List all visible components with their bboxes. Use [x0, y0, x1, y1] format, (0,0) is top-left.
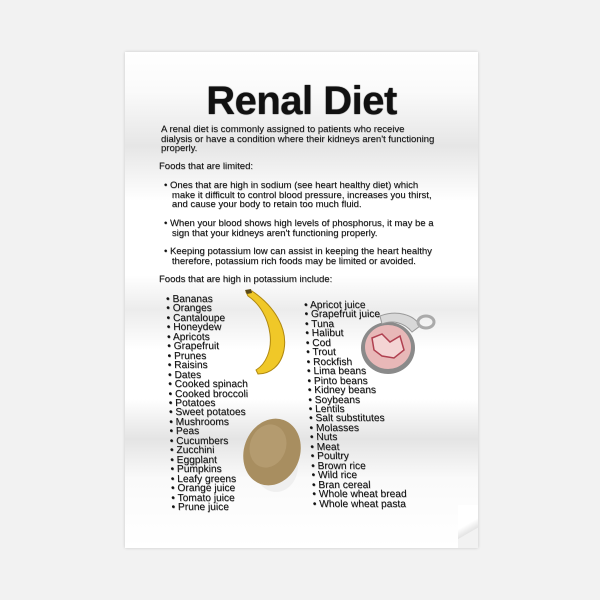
poster sheet	[125, 52, 478, 548]
list: right column: • Grapefruit juice	[304, 309, 380, 320]
list: right column: • Kidney beans	[308, 385, 376, 396]
list: left column: • Cucumbers	[170, 436, 228, 447]
bullet: potassium	[164, 246, 432, 267]
list: left column: • Oranges	[166, 303, 212, 314]
list: right column: • Molasses	[309, 423, 359, 434]
list: left column: • Dates	[168, 370, 201, 381]
list: left column: • Orange juice	[171, 483, 235, 494]
bullet: phosphorus	[164, 218, 434, 239]
list: right column: • Brown rice	[311, 461, 366, 472]
page curl	[458, 505, 478, 548]
list: right column: • Apricot juice	[304, 300, 366, 311]
title: Renal Diet	[206, 79, 397, 123]
bullet: potassium: • Keeping potassium low can assist in keeping the heart healthy	[164, 246, 432, 257]
icon: tuna can	[361, 312, 436, 374]
bullet: phosphorus: • When your blood shows high levels of phosphorus, it may be a	[164, 218, 433, 229]
list: left column: • Prunes	[167, 351, 206, 362]
list: right column: • Salt substitutes	[309, 413, 385, 424]
bullet: sodium: • Ones that are high in sodium (see heart healthy diet) which	[164, 180, 418, 191]
list: right column: • Lentils	[308, 404, 345, 415]
heading: limited: Foods that are limited:	[159, 161, 253, 172]
list: right column: • Meat	[310, 442, 340, 453]
list: left column: • Honeydew	[167, 322, 222, 333]
list: right column: • Soybeans	[308, 395, 360, 406]
list: right column: • Whole wheat bread	[312, 489, 407, 500]
bullet: potassium: therefore, potassium rich foods may be limited or avoided.	[172, 256, 416, 267]
list: left column: • Pumpkins	[170, 464, 222, 475]
list: left column: • Peas	[169, 426, 199, 437]
list: right column	[304, 300, 407, 510]
intro text: A renal diet is commonly assigned to patients who receive	[161, 124, 404, 135]
intro text: dialysis or have a condition where their kidneys aren't functioning	[161, 134, 434, 145]
bullet: phosphorus: sign that your kidneys aren't functioning properly.	[172, 228, 377, 239]
bullet: sodium: make it difficult to control blood pressure, increases you thirst,	[172, 190, 432, 201]
heading: potassium: Foods that are high in potassium include:	[159, 274, 332, 285]
list: left column: • Bananas	[166, 294, 213, 305]
list: left column: • Prune juice	[171, 502, 229, 513]
bullet: sodium	[164, 180, 432, 210]
list: left column: • Cantaloupe	[166, 313, 225, 324]
list: right column: • Wild rice	[311, 470, 357, 481]
intro text	[161, 124, 434, 154]
list: right column: • Bran cereal	[312, 480, 371, 491]
list: right column: • Cod	[306, 338, 331, 349]
icon: potato	[243, 418, 301, 492]
list: right column: • Lima beans	[307, 366, 366, 377]
list: left column: • Mushrooms	[169, 417, 229, 428]
list: left column: • Potatoes	[169, 398, 216, 409]
list: right column: • Tuna	[305, 319, 334, 330]
list: left column: • Grapefruit	[167, 341, 219, 352]
list: right column: • Poultry	[311, 451, 349, 462]
list: left column: • Eggplant	[170, 455, 217, 466]
intro text: properly.	[161, 143, 197, 154]
list: right column: • Pinto beans	[307, 376, 368, 387]
list: right column: • Nuts	[310, 432, 338, 443]
bullet: sodium: and cause your body to retain too much fluid.	[172, 199, 362, 210]
list: right column: • Halibut	[305, 328, 344, 339]
icon: banana	[245, 289, 286, 374]
list: left column: • Cooked broccoli	[168, 389, 248, 400]
list: left column: • Cooked spinach	[168, 379, 248, 390]
list: left column: • Leafy greens	[171, 474, 236, 485]
list: left column	[166, 294, 248, 513]
list: left column: • Raisins	[168, 360, 208, 371]
list: right column: • Whole wheat pasta	[313, 499, 406, 510]
list: right column: • Trout	[306, 347, 336, 358]
list: left column: • Sweet potatoes	[169, 407, 246, 418]
list: left column: • Apricots	[167, 332, 210, 343]
list: left column: • Tomato juice	[171, 493, 235, 504]
list: left column: • Zucchini	[170, 445, 215, 456]
list: right column: • Rockfish	[306, 357, 352, 368]
